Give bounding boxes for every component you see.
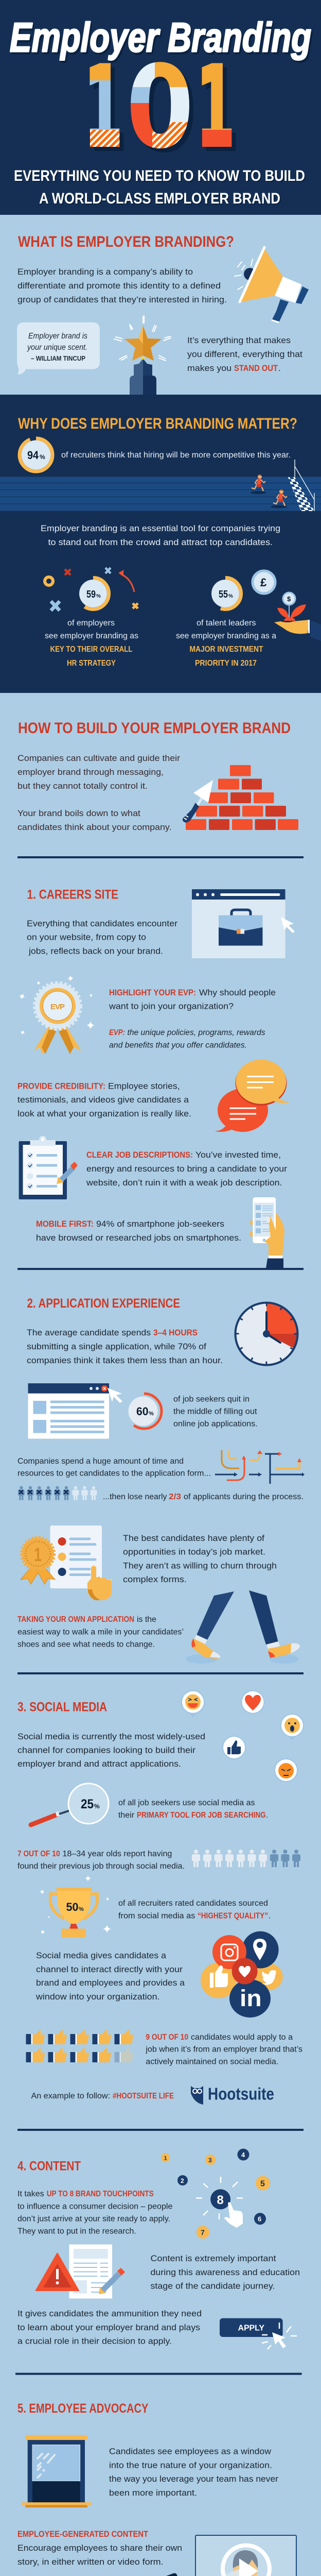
text: social media channel: window into your organization. bbox=[35, 1992, 159, 2002]
text: own application: easiest way to walk a mile in your candidates’ bbox=[17, 1628, 184, 1636]
text: provide credibility: Employee stories, bbox=[108, 1081, 180, 1091]
text: touchpoints: It takes bbox=[17, 2190, 44, 2198]
text: highlight EVP: want to join your organization? bbox=[109, 1002, 234, 1011]
text: huge amount of time: resources to get candidates to the application form... bbox=[17, 1469, 211, 1478]
stat: 60 percent: online job applications. bbox=[173, 1420, 258, 1428]
text: social media intro bbox=[17, 1732, 205, 1769]
intro text: employer brand through messaging, bbox=[17, 767, 164, 777]
text: own application bbox=[17, 1615, 184, 1649]
definition text: differentiate and promote this identity to a defined bbox=[17, 281, 221, 291]
text: highlight EVP: the unique policies, programs, rewards bbox=[128, 1028, 265, 1037]
text: touchpoints: to influence a consumer decision – people bbox=[17, 2202, 173, 2211]
text: social media intro: employer brand and attract applications. bbox=[17, 1759, 181, 1769]
text: application time: companies think it takes them less than an hour. bbox=[27, 1355, 223, 1365]
text: clear job descriptions: CLEAR JOB DESCRIPTIONS: bbox=[86, 1150, 193, 1160]
quote bubble bbox=[17, 323, 100, 375]
stat: 55 percent with money icons bbox=[210, 571, 321, 641]
text: best candidates: The best candidates have plenty of bbox=[123, 1533, 264, 1543]
stat: 55 percent with money icons: % bbox=[228, 594, 233, 599]
title number: 101 bbox=[85, 41, 239, 178]
icon: people lost: of applicants during the process. bbox=[184, 1493, 304, 1501]
stat: 9 out of 10 with thumbs: actively maintained on social media. bbox=[146, 2058, 278, 2066]
subheading: 1. CAREERS SITE bbox=[27, 887, 118, 902]
text: employee-generated content bbox=[17, 2529, 182, 2567]
text: 55 percent caption: of talent leaders bbox=[197, 619, 256, 628]
text: careers site intro: on your website, from copy to bbox=[27, 933, 146, 942]
quote bubble: Employer brand is bbox=[28, 332, 87, 341]
text: ammunition: to learn about your employer brand and plays bbox=[17, 2323, 200, 2332]
text: essential tool: to stand out from the crowd and attract top candidates. bbox=[48, 537, 273, 547]
example: Hootsuite: An example to follow: bbox=[31, 2092, 110, 2100]
stat: 25 percent with magnifier: of all job seekers use social media as bbox=[118, 1799, 255, 1807]
text: 55 percent caption: MAJOR INVESTMENT bbox=[189, 645, 263, 654]
text: social media channel: Social media gives candidates a bbox=[36, 1951, 167, 1960]
text: stand out: . bbox=[278, 363, 281, 373]
stat: 25 percent with magnifier: . bbox=[266, 1811, 268, 1820]
text: stand out: you different, everything that bbox=[187, 349, 302, 359]
subheading: 2. APPLICATION EXPERIENCE bbox=[27, 1296, 180, 1311]
text: ammunition bbox=[17, 2309, 202, 2346]
stat: 60 percent: % bbox=[149, 1411, 154, 1417]
text: application time bbox=[27, 1328, 223, 1365]
title number: 101: 1 bbox=[89, 47, 127, 175]
icon: clipboard bbox=[19, 1136, 78, 1199]
text: best candidates: They aren’t as willing to churn through bbox=[123, 1561, 277, 1570]
text: highlight EVP: HIGHLIGHT YOUR EVP: bbox=[109, 988, 196, 997]
text: touchpoints: They want to put in the research. bbox=[17, 2227, 136, 2236]
definition text: group of candidates that they’re interested in hiring. bbox=[17, 295, 227, 304]
text: 59 percent caption: of employers bbox=[67, 619, 115, 628]
text: best candidates: complex forms. bbox=[123, 1574, 187, 1584]
text: stand out: makes you bbox=[187, 363, 231, 373]
icon: walking legs bbox=[186, 1590, 300, 1664]
stat: 25 percent with magnifier: 25 bbox=[81, 1797, 94, 1811]
icon: speech bubbles bbox=[215, 1060, 290, 1132]
text: 55 percent caption bbox=[176, 619, 276, 668]
icon: video screen with camera bbox=[128, 2535, 296, 2576]
text: ammunition: It gives candidates the ammunition they need bbox=[17, 2309, 202, 2318]
text: touchpoints bbox=[17, 2190, 173, 2236]
text: social media channel: brand and employees and provides a bbox=[36, 1978, 185, 1988]
icon: eight touchpoints: 4 bbox=[241, 2151, 245, 2159]
text: 55 percent caption: PRIORITY IN 2017 bbox=[195, 659, 257, 668]
text: best candidates bbox=[123, 1533, 277, 1584]
section 1: careers site bbox=[17, 856, 304, 1268]
stat: 50 percent with trophy bbox=[39, 1875, 271, 1937]
text: 59 percent caption bbox=[45, 619, 138, 668]
text: content importance: stage of the candidate journey. bbox=[150, 2281, 275, 2291]
intro text: candidates think about your company. bbox=[17, 822, 172, 832]
illustration: running track bbox=[0, 460, 321, 511]
panel: how to build your employer brand bbox=[0, 693, 321, 2576]
text: own application: shoes and see what needs to change. bbox=[17, 1640, 155, 1649]
icon: eight touchpoints: 7 bbox=[201, 2228, 205, 2236]
text: social media intro: Social media is currently the most widely-used bbox=[17, 1732, 205, 1741]
icon: people lost: 2/3 bbox=[169, 1493, 181, 1501]
icon: eight touchpoints: 8 bbox=[217, 2193, 224, 2207]
text: own application: TAKING YOUR OWN APPLICATION bbox=[17, 1615, 134, 1624]
stat: 50 percent with trophy: % bbox=[79, 1906, 84, 1912]
stat: 94 percent bbox=[20, 438, 291, 471]
stat: 7 out of 10 bbox=[17, 1850, 300, 1871]
text: clear job descriptions: You’ve invested time, bbox=[195, 1150, 281, 1160]
subtitle: A WORLD-CLASS EMPLOYER BRAND bbox=[40, 191, 281, 208]
text: stand out bbox=[187, 335, 302, 373]
text: social media intro: channel for companies looking to build their bbox=[17, 1745, 195, 1755]
text: essential tool bbox=[41, 523, 280, 547]
stat: 7 out of 10: 7 OUT OF 10 bbox=[17, 1850, 60, 1858]
text: touchpoints: don’t just arrive at your site ready to apply. bbox=[17, 2215, 170, 2224]
text: provide credibility bbox=[17, 1081, 191, 1118]
text: social media channel bbox=[35, 1951, 185, 2002]
text: highlight EVP: and benefits that you offer candidates. bbox=[109, 1041, 247, 1050]
stat: 25 percent with magnifier: their bbox=[118, 1811, 134, 1820]
text: application time: submitting a single application, while 70% of bbox=[27, 1342, 206, 1351]
panel: why does employer branding matter bbox=[0, 395, 321, 693]
stat: 60 percent: of job seekers quit in bbox=[173, 1395, 249, 1404]
text: own application: is the bbox=[137, 1615, 156, 1624]
title number: 101: 1 bbox=[85, 43, 122, 171]
section 2: application experience bbox=[17, 1268, 305, 1664]
quote bubble: your unique scent. bbox=[27, 343, 87, 352]
text: clear job descriptions: energy and resources to bring a candidate to your bbox=[86, 1164, 287, 1174]
stat: 60 percent: 60 bbox=[136, 1405, 148, 1418]
stat: 59 percent with playbook icons: 59 bbox=[86, 589, 96, 600]
icon: eight touchpoints: 3 bbox=[208, 2157, 212, 2164]
icon: clock bbox=[236, 1302, 297, 1365]
icon: eight touchpoints: 2 bbox=[181, 2177, 184, 2184]
definition text: Employer branding is a company’s ability to bbox=[17, 267, 193, 277]
section 5: employee advocacy bbox=[0, 2373, 309, 2576]
icon: medal and checklist with hand: 1 bbox=[34, 1544, 42, 1565]
stat: 94 percent: of recruiters think that hiring will be more competitive this year. bbox=[61, 451, 291, 460]
icon: eight touchpoints: 1 bbox=[164, 2156, 167, 2162]
icon: eight touchpoints: 6 bbox=[258, 2215, 261, 2223]
stat: 55 percent with money icons: $ bbox=[287, 595, 291, 603]
example: Hootsuite: #HOOTSUITE LIFE bbox=[113, 2092, 174, 2100]
text: mobile first bbox=[36, 1219, 241, 1243]
stat: 50 percent with trophy: “HIGHEST QUALITY” bbox=[198, 1911, 268, 1921]
text: touchpoints: UP TO 8 BRAND TOUCHPOINTS bbox=[47, 2190, 154, 2198]
stat: 59 percent with playbook icons bbox=[45, 568, 138, 611]
text: mobile first: MOBILE FIRST: bbox=[36, 1219, 94, 1229]
icon: social network cluster bbox=[201, 1931, 283, 2018]
text: content importance: during this awareness and education bbox=[150, 2267, 300, 2277]
text: employee-generated content: Encourage employees to share their own bbox=[17, 2543, 182, 2553]
stat: 50 percent with trophy: from social media as bbox=[118, 1911, 195, 1921]
icon: maze of arrows bbox=[215, 1450, 305, 1484]
text: stand out: It’s everything that makes bbox=[187, 335, 291, 345]
text: 59 percent caption: HR STRATEGY bbox=[67, 659, 116, 668]
quote bubble: – WILLIAM TINCUP bbox=[31, 354, 85, 362]
stat: 9 out of 10 with thumbs: 9 OUT OF 10 bbox=[146, 2033, 188, 2042]
text: employee-generated content: EMPLOYEE-GENERATED CONTENT bbox=[17, 2529, 149, 2539]
icon: social network cluster: in bbox=[240, 1985, 262, 2011]
text: huge amount of time bbox=[17, 1457, 211, 1478]
stat: 25 percent with magnifier bbox=[31, 1784, 268, 1825]
icon: application window with cursor bbox=[28, 1383, 122, 1438]
icon: star on pedestal bbox=[114, 316, 171, 395]
text: content importance: Content is extremely important bbox=[150, 2253, 276, 2263]
subheading: 3. SOCIAL MEDIA bbox=[17, 1700, 107, 1715]
text: careers site intro: Everything that candidates encounter bbox=[27, 919, 177, 928]
stat: 7 out of 10: 18–34 year olds report having bbox=[62, 1850, 172, 1858]
text: application time: The average candidate spends bbox=[27, 1328, 151, 1337]
intro text bbox=[17, 753, 180, 832]
panel: what is employer branding bbox=[0, 215, 321, 395]
example: Hootsuite: Hootsuite bbox=[208, 2084, 274, 2103]
subtitle bbox=[14, 167, 306, 208]
subtitle: A WORLD-CLASS EMPLOYER BRAND bbox=[39, 190, 280, 207]
section 3: social media bbox=[17, 1672, 304, 2105]
text: provide credibility: PROVIDE CREDIBILITY: bbox=[17, 1081, 105, 1091]
text: window into organization: Candidates see employees as a window bbox=[109, 2447, 272, 2456]
stat: 59 percent with playbook icons: % bbox=[96, 594, 101, 599]
icon: emoji reactions bbox=[182, 1691, 304, 1782]
icon: people lost: ...then lose nearly bbox=[103, 1493, 167, 1501]
definition text bbox=[17, 267, 227, 304]
text: window into organization: into the true nature of your organization. bbox=[109, 2461, 272, 2470]
stat: 25 percent with magnifier: % bbox=[94, 1803, 100, 1810]
icon: apply button with cursor bbox=[220, 2318, 297, 2349]
stat: 60 percent: the middle of filling out bbox=[173, 1408, 257, 1416]
stat: 7 out of 10: found their previous job through social media. bbox=[17, 1862, 185, 1871]
stat: 55 percent with money icons: 55 bbox=[219, 589, 228, 600]
icon: bricks and trowel bbox=[183, 765, 298, 830]
stat: 94 percent: 94 bbox=[27, 449, 39, 462]
title number: 101: 1 bbox=[197, 43, 235, 171]
text: content importance bbox=[150, 2253, 300, 2291]
icon: apply button with cursor: APPLY bbox=[238, 2324, 264, 2333]
text: window into organization: the way you leverage your team has never bbox=[109, 2474, 278, 2484]
text: ammunition: a crucial role in their decision to apply. bbox=[17, 2336, 172, 2346]
stat: 50 percent with trophy: . bbox=[269, 1911, 271, 1921]
stat: 94 percent: % bbox=[40, 453, 45, 461]
panel: hero header: 1 bbox=[201, 47, 239, 175]
text: best candidates: opportunities in today’s job market. bbox=[123, 1547, 265, 1557]
icon: eight touchpoints bbox=[161, 2148, 270, 2239]
stat: 60 percent bbox=[127, 1394, 258, 1429]
stat: 9 out of 10 with thumbs: job when it’s from an employer brand that’s bbox=[145, 2045, 302, 2054]
text: 59 percent caption: KEY TO THEIR OVERALL bbox=[50, 645, 133, 654]
subheading: 4. CONTENT bbox=[17, 2159, 81, 2173]
heading: WHAT IS EMPLOYER BRANDING? bbox=[18, 233, 234, 250]
text: application time: 3–4 HOURS bbox=[153, 1328, 198, 1337]
subheading: 5. EMPLOYEE ADVOCACY bbox=[17, 2401, 149, 2416]
icon: document with warning sign bbox=[36, 2244, 125, 2298]
intro text: but they cannot totally control it. bbox=[17, 781, 148, 791]
stat: 55 percent with money icons: £ bbox=[260, 576, 267, 589]
text: clear job descriptions bbox=[86, 1150, 287, 1188]
icon: browser with briefcase bbox=[192, 889, 295, 958]
text: 55 percent caption: see employer branding as a bbox=[176, 632, 276, 640]
text: 59 percent caption: see employer branding as bbox=[45, 632, 138, 640]
text: stand out: STAND OUT bbox=[234, 363, 278, 373]
text: careers site intro bbox=[27, 919, 177, 956]
text: essential tool: Employer branding is an essential tool for companies trying bbox=[41, 523, 280, 533]
intro text: Your brand boils down to what bbox=[17, 808, 140, 818]
text: careers site intro: jobs, reflects back on your brand. bbox=[28, 946, 163, 956]
text: social media channel: channel to interact directly with your bbox=[36, 1964, 183, 1974]
stat: 50 percent with trophy: 50 bbox=[66, 1901, 78, 1913]
text: huge amount of time: Companies spend a huge amount of time and bbox=[17, 1457, 184, 1466]
text: clear job descriptions: website, don’t ruin it with a weak job description. bbox=[86, 1178, 282, 1188]
panel: hero header bbox=[0, 0, 321, 215]
icon: eight touchpoints: 5 bbox=[260, 2179, 265, 2189]
stat: 50 percent with trophy: of all recruiters rated candidates sourced bbox=[118, 1899, 268, 1908]
icon: megaphone bbox=[235, 247, 309, 323]
title number: 101: 0 bbox=[130, 45, 198, 178]
stat: 25 percent with magnifier: PRIMARY TOOL FOR JOB SEARCHING bbox=[137, 1811, 266, 1820]
icon: EVP rosette: EVP bbox=[50, 1003, 65, 1011]
text: provide credibility: look at what your organization is really like. bbox=[17, 1109, 191, 1118]
stat: 9 out of 10 with thumbs bbox=[26, 2030, 302, 2066]
text: highlight EVP: Why should people bbox=[199, 988, 276, 997]
intro text: Companies can cultivate and guide their bbox=[17, 753, 180, 763]
stat: 9 out of 10 with thumbs: candidates would apply to a bbox=[191, 2033, 293, 2042]
icon: medal and checklist with hand bbox=[21, 1526, 112, 1600]
text: window into organization bbox=[109, 2447, 278, 2498]
section 4: content bbox=[17, 2129, 304, 2349]
text: highlight EVP bbox=[109, 988, 276, 1050]
icon: window bbox=[22, 2435, 91, 2507]
title number: 101: 0 bbox=[126, 41, 194, 174]
icon: people lost bbox=[18, 1486, 304, 1501]
text: mobile first: 94% of smartphone job-seekers bbox=[96, 1219, 224, 1229]
text: provide credibility: testimonials, and videos give candidates a bbox=[17, 1095, 189, 1105]
text: window into organization: been more important. bbox=[109, 2488, 197, 2498]
text: employee-generated content: story, in either written or video form. bbox=[17, 2557, 164, 2567]
icon: EVP rosette bbox=[18, 975, 95, 1054]
icon: hand holding phone bbox=[249, 1197, 284, 1268]
example: Hootsuite bbox=[31, 2084, 274, 2105]
text: mobile first: have browsed or researched jobs on smartphones. bbox=[36, 1233, 241, 1243]
text: highlight EVP: EVP: bbox=[109, 1028, 125, 1037]
